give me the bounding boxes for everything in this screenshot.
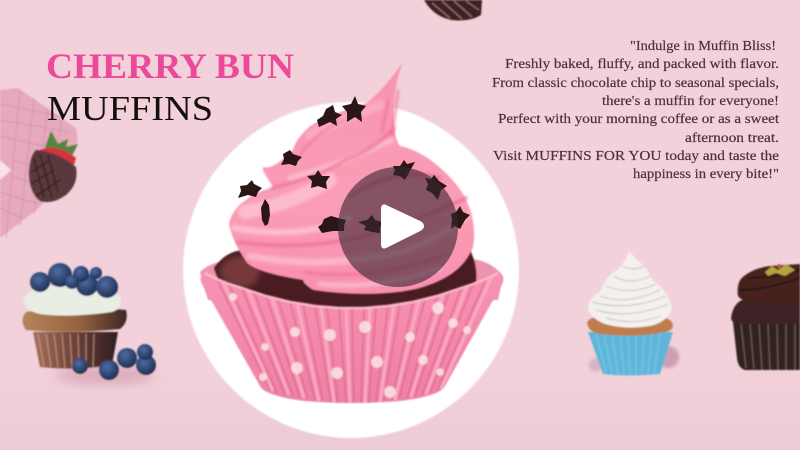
promotional text block <box>492 39 779 182</box>
promotional text block: From classic chocolate chip to seasonal specials, <box>492 76 779 91</box>
liner back rim <box>200 258 503 300</box>
title line: muffins: MUFFINS <box>47 89 213 128</box>
chocolate frosting <box>738 264 800 302</box>
cream <box>24 286 121 316</box>
chocolate star sprinkles <box>238 96 470 233</box>
blueberry muffin <box>22 263 156 384</box>
frosting <box>229 62 474 294</box>
icon: chocolate strawberry <box>29 131 78 202</box>
title line: cherry bun: CHERRY BUN <box>46 46 294 86</box>
cake <box>587 318 673 336</box>
muffin liner <box>33 332 118 369</box>
promotional text block: Visit MUFFINS FOR YOU today and taste the <box>493 149 779 164</box>
play button disc <box>338 167 458 287</box>
white frosted cupcake with blue liner <box>587 251 679 376</box>
main cupcake <box>200 62 503 403</box>
chocolate cupcake <box>731 264 800 370</box>
decorative pink chocolate bar <box>0 88 78 238</box>
promotional text block: there's a muffin for everyone! <box>602 94 779 109</box>
sprinkles <box>765 264 795 276</box>
icon: chocolate dessert at top edge <box>424 0 482 20</box>
video play overlay <box>338 167 458 287</box>
blue liner <box>588 332 673 376</box>
white frosting <box>588 251 672 328</box>
dark liner <box>733 322 800 370</box>
liner pleats <box>201 273 503 403</box>
liner dots <box>229 293 471 398</box>
promotional text block: "Indulge in Muffin Bliss! <box>630 39 776 54</box>
cake <box>214 250 476 312</box>
muffin top <box>22 308 127 332</box>
cake <box>731 300 800 324</box>
promotional text block: happiness in every bite!" <box>633 167 779 182</box>
promotional text block: Freshly baked, fluffy, and packed with flavor. <box>505 57 779 72</box>
icon: play triangle <box>382 205 423 248</box>
white circle backdrop <box>183 102 519 438</box>
promotional text block: Perfect with your morning coffee or as a sweet <box>498 112 779 127</box>
blueberries <box>30 263 156 380</box>
promotional text block: afternoon treat. <box>685 131 779 146</box>
